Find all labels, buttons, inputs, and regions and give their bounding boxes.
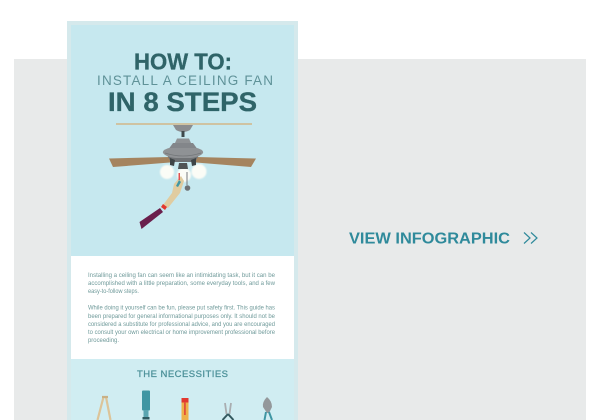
icon: screwdriver	[142, 390, 150, 420]
icon: wire cutters	[263, 397, 272, 420]
title: HOW TO:	[134, 48, 232, 74]
icon: pliers	[222, 403, 234, 420]
icon: voltage tester	[182, 398, 188, 420]
introduction text panel: proceeding.	[88, 338, 119, 344]
lower section: the necessities	[71, 359, 294, 420]
section heading: THE NECESSITIES	[137, 369, 228, 380]
introduction text panel: Installing a ceiling fan can seem like an intimidating task, but it can be	[88, 273, 276, 279]
title: INSTALL A CEILING FAN	[97, 73, 273, 88]
title: IN 8 STEPS	[108, 87, 257, 117]
introduction text panel: to consult your own electrical or home improvement professional before	[88, 330, 276, 336]
introduction text panel	[71, 256, 294, 359]
infographic preview card	[67, 21, 298, 420]
introduction text panel: accomplished with a little preparation, some everyday tools, and a few	[88, 281, 276, 287]
introduction text panel: easy-to-follow steps.	[88, 289, 139, 295]
introduction text panel: been prepared for general informational purposes only. It should not be	[88, 314, 276, 320]
introduction text panel: considered a substitute for professional advice, and you are encouraged	[88, 322, 275, 328]
title	[97, 48, 273, 117]
icon: double chevron arrow	[524, 232, 537, 244]
icon: ladder	[98, 397, 110, 420]
call to action: view infographic: VIEW INFOGRAPHIC	[349, 230, 510, 248]
introduction text panel: While doing it yourself can be fun, please put safety first. This guide has	[88, 306, 275, 312]
illustration: ceiling fan with hand	[109, 123, 256, 229]
